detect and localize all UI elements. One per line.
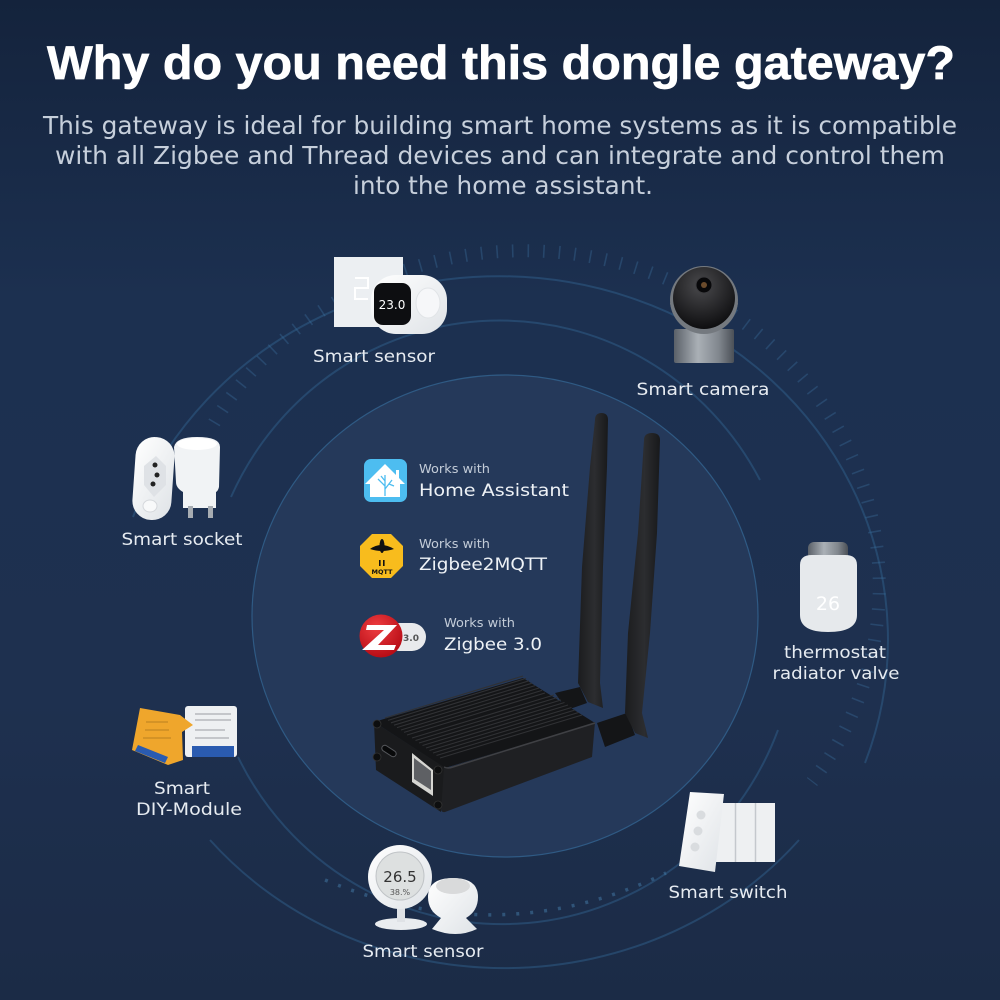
text: works with Home Assistant [419,461,569,501]
side face [441,722,595,812]
device: smart sensor pair: 38.% [390,888,411,897]
device: smart sensor pair: 26.5 [383,868,417,886]
label: smart sensor: Smart sensor [313,347,435,367]
description: into the home assistant. [353,171,653,200]
text: works with Home Assistant: Works with [419,461,490,476]
icon: Zigbee2MQTT: MQTT [371,568,393,576]
device: smart switch [679,792,775,872]
description: with all Zigbee and Thread devices and can integrate and control them [55,141,945,170]
text: works with Zigbee2MQTT [419,536,548,575]
screws [373,720,442,809]
label: smart sensor bottom: Smart sensor [362,942,484,962]
icon: Zigbee 3.0: 3.0 [403,634,419,644]
antenna left [578,413,608,708]
text: works with Zigbee 3.0: Works with [444,615,515,630]
antenna right [625,433,660,738]
device: thermostat radiator valve [800,542,857,632]
label: thermostat radiator valve: radiator valve [772,664,900,684]
description [42,111,957,200]
antenna connector right [597,713,635,747]
text: works with Home Assistant: Home Assistant [419,481,569,501]
device: smart camera [670,266,738,363]
device: smart DIY module [132,706,237,765]
circular rings backdrop [133,251,888,968]
text: works with Zigbee 3.0 [444,615,542,655]
text: works with Zigbee 3.0: Zigbee 3.0 [444,635,542,655]
device: smart socket [131,436,220,521]
device: smart sensor pair [368,845,478,934]
gateway device [373,413,660,812]
label: smart socket: Smart socket [122,530,243,550]
device: smart sensor thermostat: 23.0 [379,298,405,312]
text: works with Zigbee2MQTT: Zigbee2MQTT [419,555,548,575]
device: smart sensor thermostat [334,257,447,334]
description: This gateway is ideal for building smart home systems as it is compatible [42,111,957,140]
icon: Zigbee2MQTT [360,534,403,578]
icon: Zigbee 3.0 [360,614,426,658]
USB-C port [381,744,397,758]
antenna connector left [555,687,587,710]
top heatsink [374,678,595,768]
icon: Home Assistant [364,459,407,502]
label: smart DIY-module: Smart [154,779,210,799]
title: Why do you need this dongle gateway? [47,36,955,89]
ethernet port [412,753,433,796]
device: thermostat radiator valve: 26 [816,593,840,615]
label: thermostat radiator valve: thermostat [784,643,886,663]
text: works with Zigbee2MQTT: Works with [419,536,490,551]
label: thermostat radiator valve [772,643,900,684]
label: smart switch: Smart switch [668,883,788,903]
label: smart camera: Smart camera [636,380,770,400]
label: smart DIY-module [136,779,242,820]
front face [374,722,444,812]
label: smart DIY-module: DIY-Module [136,800,242,820]
